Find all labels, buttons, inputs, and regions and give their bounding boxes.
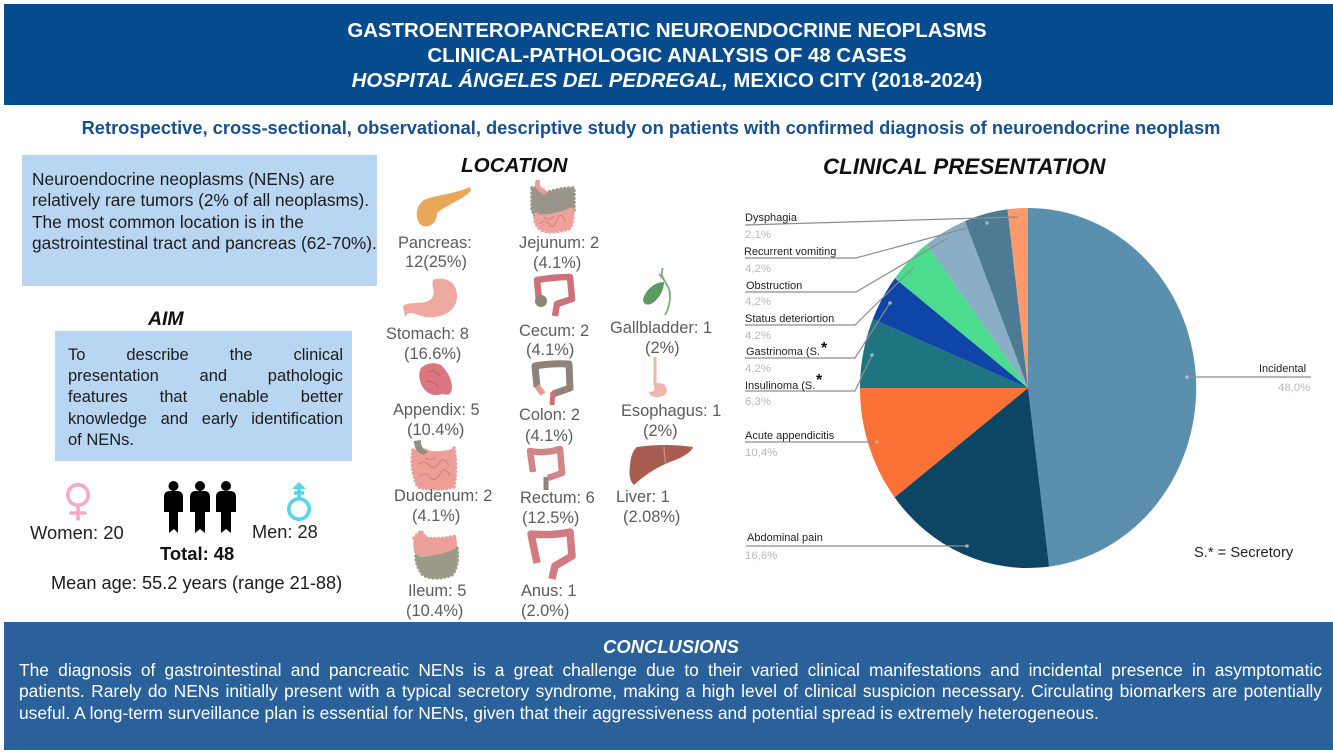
aim text: To describe the clinical [68,346,343,364]
organ: ileum [406,531,466,620]
organ: stomach: Stomach: 8 [386,325,469,343]
leader line: insulinoma [745,353,874,408]
legend note: S.* = Secretory [1194,545,1294,561]
organ: gallbladder [610,268,712,357]
leader line: incidental: Incidental [1259,363,1306,375]
clinical presentation panel [744,154,1311,568]
organ: duodenum [394,440,492,525]
organ: stomach: (16.6%) [404,345,461,363]
conclusions text: useful. A long-term surveillance plan is essential for NENs, given that their aggressiveness and potential spread is extremely heterogeneous. [19,703,1099,723]
organ: liver: (2.08%) [623,508,680,526]
leader line: dysphagia [745,212,1018,241]
leader line: incidental: 48,0% [1278,382,1310,394]
panel: conclusions [4,622,1333,750]
leader line: insulinoma: Insulinoma (S. [745,380,815,392]
organ: duodenum: Duodenum: 2 [394,487,492,505]
organ: cecum: (4.1%) [526,341,574,359]
leader line: acute appendicitis [745,430,879,459]
aim text [68,346,343,449]
organ: pancreas: 12(25%) [405,253,467,271]
organ: esophagus: (2%) [643,422,678,440]
demographics [30,522,342,593]
leader line: insulinoma: 6,3% [745,396,771,408]
organ: liver: Liver: 1 [616,488,670,506]
organ: colon: Colon: 2 [519,406,580,424]
location panel [386,154,721,620]
introduction text: gastrointestinal tract and pancreas (62-70%). [32,233,377,253]
leader line: insulinoma: * [816,372,823,389]
organ: pancreas: Pancreas: [398,234,472,252]
organ: cecum [519,277,589,359]
organ: rectum [520,449,595,527]
leader line: status deterioration: Status deteriortion [745,313,834,325]
organ: esophagus [621,357,721,440]
organ: gallbladder: (2%) [645,339,680,357]
leader line: abdominal pain: 16,6% [745,550,777,562]
organ: pancreas [398,187,472,271]
total count: Total: 48 [160,543,234,564]
leader line: gastrinoma [745,301,892,375]
leader line: obstruction: 4,2% [745,296,771,308]
introduction text: relatively rare tumors (2% of all neoplasms). [32,190,369,210]
leader line: incidental [1185,363,1311,394]
introduction text: The most common location is in the [32,212,304,232]
icon: three people [164,481,236,533]
leader line: obstruction [745,238,948,308]
header band [4,4,1333,105]
leader line: acute appendicitis: 10,4% [745,447,777,459]
aim text: features that enable better [68,388,343,406]
conclusions text: patients. Rarely do NENs initially present with a typical secretory syndrome, making a high level of clinical suspicion necessary. Circulating biomarkers are potentially [19,681,1322,701]
leader line: gastrinoma: * [821,340,828,357]
leader line: abdominal pain: Abdominal pain [747,532,823,544]
clinical presentation heading: CLINICAL PRESENTATION [823,154,1106,179]
organ: ileum: Ileum: 5 [408,582,466,600]
title: CLINICAL-PATHOLOGIC ANALYSIS OF 48 CASES [427,45,907,67]
organ: gallbladder: Gallbladder: 1 [610,319,712,337]
women count: Women: 20 [30,522,124,543]
panel: introduction [22,155,377,286]
organ: esophagus: Esophagus: 1 [621,402,721,420]
leader line: dysphagia: Dysphagia [745,212,798,224]
leader line: gastrinoma: Gastrinoma (S. [746,346,820,358]
conclusions text [19,660,1322,723]
conclusions text: The diagnosis of gastrointestinal and pancreatic NENs is a great challenge due to their varied clinical manifestations and incidental presence in asymptomatic [19,660,1322,680]
leader line: abdominal pain [745,532,969,562]
organ: ileum: (10.4%) [406,602,463,620]
organ: anus: Anus: 1 [521,582,577,600]
leader line: recurrent vomiting [744,228,967,275]
title: GASTROENTEROPANCREATIC NEUROENDOCRINE NEOPLASMS [347,20,987,42]
leader line: status deterioration: 4,2% [745,330,771,342]
organ: cecum: Cecum: 2 [519,322,589,340]
organ: appendix [393,363,480,439]
leader line: recurrent vomiting: Recurrent vomiting [744,246,836,258]
title [347,20,987,92]
leader line: obstruction: Obstruction [746,280,802,292]
panel: aim [55,331,352,461]
leader line: acute appendicitis: Acute appendicitis [745,430,835,442]
mean age: Mean age: 55.2 years (range 21-88) [51,573,342,593]
leader line: recurrent vomiting: 4,2% [745,263,771,275]
organ: jejunum: Jejunum: 2 [519,234,599,252]
organ: rectum: Rectum: 6 [520,489,595,507]
conclusions heading: CONCLUSIONS [603,636,739,657]
aim text: presentation and pathologic [68,367,343,385]
organ: anus [521,532,577,620]
leader line: status deterioration [745,266,915,342]
organ: appendix: Appendix: 5 [393,401,480,419]
study subtitle: Retrospective, cross-sectional, observational, descriptive study on patients with confirmed diagnosis of neuroendocrine neoplasm [82,117,1220,138]
organ: jejunum [519,180,599,272]
organ: jejunum: (4.1%) [533,254,581,272]
organ: stomach [386,279,469,363]
aim text: knowledge and early identification [68,410,343,428]
icon: female symbol [68,485,88,519]
aim heading: AIM [148,308,184,330]
organ: colon [519,364,580,445]
leader line: gastrinoma: 4,2% [745,363,771,375]
leader line: dysphagia: 2,1% [745,229,771,241]
organ: colon: (4.1%) [525,427,573,445]
introduction text [32,169,377,253]
organ: appendix: (10.4%) [407,421,464,439]
aim text: of NENs. [68,431,134,449]
organ: duodenum: (4.1%) [412,507,460,525]
organ: rectum: (12.5%) [522,509,579,527]
icon: male symbol [289,482,309,519]
men count: Men: 28 [252,522,318,542]
organ: liver [616,445,693,526]
organ: anus: (2.0%) [521,602,569,620]
title: HOSPITAL ÁNGELES DEL PEDREGAL, MEXICO CITY (2018-2024) [352,70,982,92]
pie chart [860,208,1196,568]
location heading: LOCATION [461,154,569,177]
introduction text: Neuroendocrine neoplasms (NENs) are [32,169,335,189]
